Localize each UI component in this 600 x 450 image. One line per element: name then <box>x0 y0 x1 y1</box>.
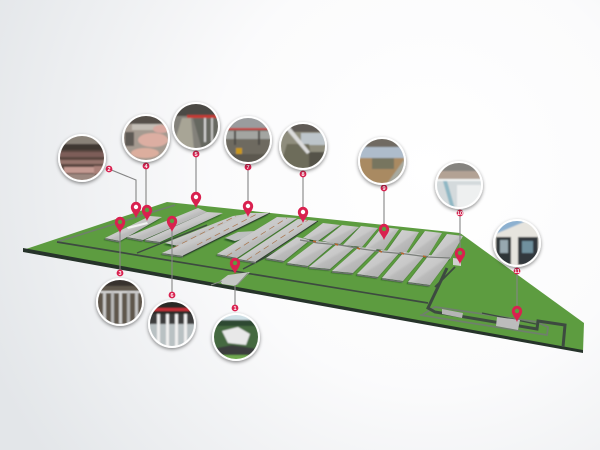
number markers: 10 <box>457 211 463 217</box>
photo 2: pig pens <box>58 134 106 182</box>
number markers: 11 <box>514 269 520 275</box>
number markers: 9 <box>382 186 386 192</box>
photo 7: barn interior <box>224 116 272 164</box>
photo 8: feed pens <box>279 122 327 170</box>
photo 9: empty pen <box>358 137 406 185</box>
number markers: 1 <box>233 306 237 312</box>
photo 4: pigs close-up <box>122 114 170 162</box>
number markers: 8 <box>301 172 305 178</box>
number markers: 6 <box>170 293 174 299</box>
buildings: back row <box>303 223 463 259</box>
number markers: 5 <box>194 152 198 158</box>
photo 6: crates with red lines <box>148 300 196 348</box>
buildings: middle pair <box>217 217 318 262</box>
number markers: 4 <box>144 164 148 170</box>
building end walls and ridge corridor <box>105 213 450 286</box>
number markers: 3 <box>118 271 122 277</box>
buildings: left group <box>105 208 270 256</box>
ground plane <box>23 202 584 353</box>
leader lines <box>109 154 517 312</box>
photo 11: control room exterior <box>493 219 541 267</box>
number markers <box>106 151 520 312</box>
photo 5: aisle with red feed lines <box>172 102 220 150</box>
number markers: 2 <box>107 167 111 173</box>
pins <box>115 192 522 322</box>
service buildings <box>211 258 520 330</box>
photo 10: white pens <box>435 161 483 209</box>
roads <box>57 205 565 347</box>
buildings: front row <box>266 237 450 285</box>
photo 3: steel gates <box>96 278 144 326</box>
photo 1: aerial render of building <box>212 313 260 361</box>
number markers: 7 <box>246 165 250 171</box>
